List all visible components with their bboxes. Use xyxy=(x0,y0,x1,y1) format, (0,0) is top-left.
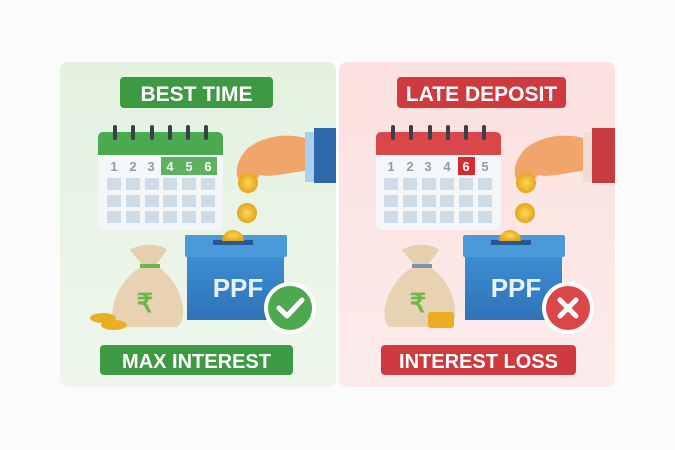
icon: PPF box xyxy=(185,235,287,320)
label: interest loss: INTEREST LOSS xyxy=(399,351,558,373)
calendar: red: 2 xyxy=(406,159,414,174)
calendar: red: 5 xyxy=(481,159,489,174)
icon: money bag xyxy=(90,245,183,330)
heading: best time: BEST TIME xyxy=(140,83,253,106)
heading: best time xyxy=(120,77,273,108)
icon: money bag: ₹ xyxy=(137,288,153,318)
icon: coins falling xyxy=(499,173,536,241)
icon: money bag: ₹ xyxy=(410,288,426,318)
calendar: green: 5 xyxy=(185,159,193,174)
icon: cross mark xyxy=(542,282,594,334)
icon: PPF box xyxy=(463,235,565,320)
icon: PPF box: PPF xyxy=(213,273,263,303)
calendar: green: 6 xyxy=(204,159,212,174)
icon: hand with blue sleeve xyxy=(237,128,336,185)
label: max interest xyxy=(100,345,293,375)
calendar: red: 4 xyxy=(443,159,451,174)
calendar: green: 1 xyxy=(110,159,118,174)
calendar: red xyxy=(376,125,501,230)
heading: late deposit xyxy=(397,77,566,108)
calendar: red: 1 xyxy=(387,159,395,174)
calendar: red: 6 xyxy=(462,159,470,174)
calendar: green: 2 xyxy=(129,159,137,174)
calendar: red: 3 xyxy=(424,159,432,174)
calendar: green: 3 xyxy=(147,159,155,174)
icon: coins falling xyxy=(222,173,258,241)
icon: PPF box: PPF xyxy=(491,273,541,303)
panel: late deposit xyxy=(339,62,615,387)
calendar: green: 4 xyxy=(166,159,174,174)
heading: late deposit: LATE DEPOSIT xyxy=(406,83,557,106)
label: interest loss xyxy=(381,345,576,375)
icon: hand with red sleeve xyxy=(515,128,615,185)
icon: check mark xyxy=(264,282,316,334)
label: max interest: MAX INTEREST xyxy=(122,351,271,373)
calendar: green xyxy=(98,125,223,230)
icon: money bag xyxy=(384,245,455,328)
panel: best time xyxy=(60,62,336,387)
